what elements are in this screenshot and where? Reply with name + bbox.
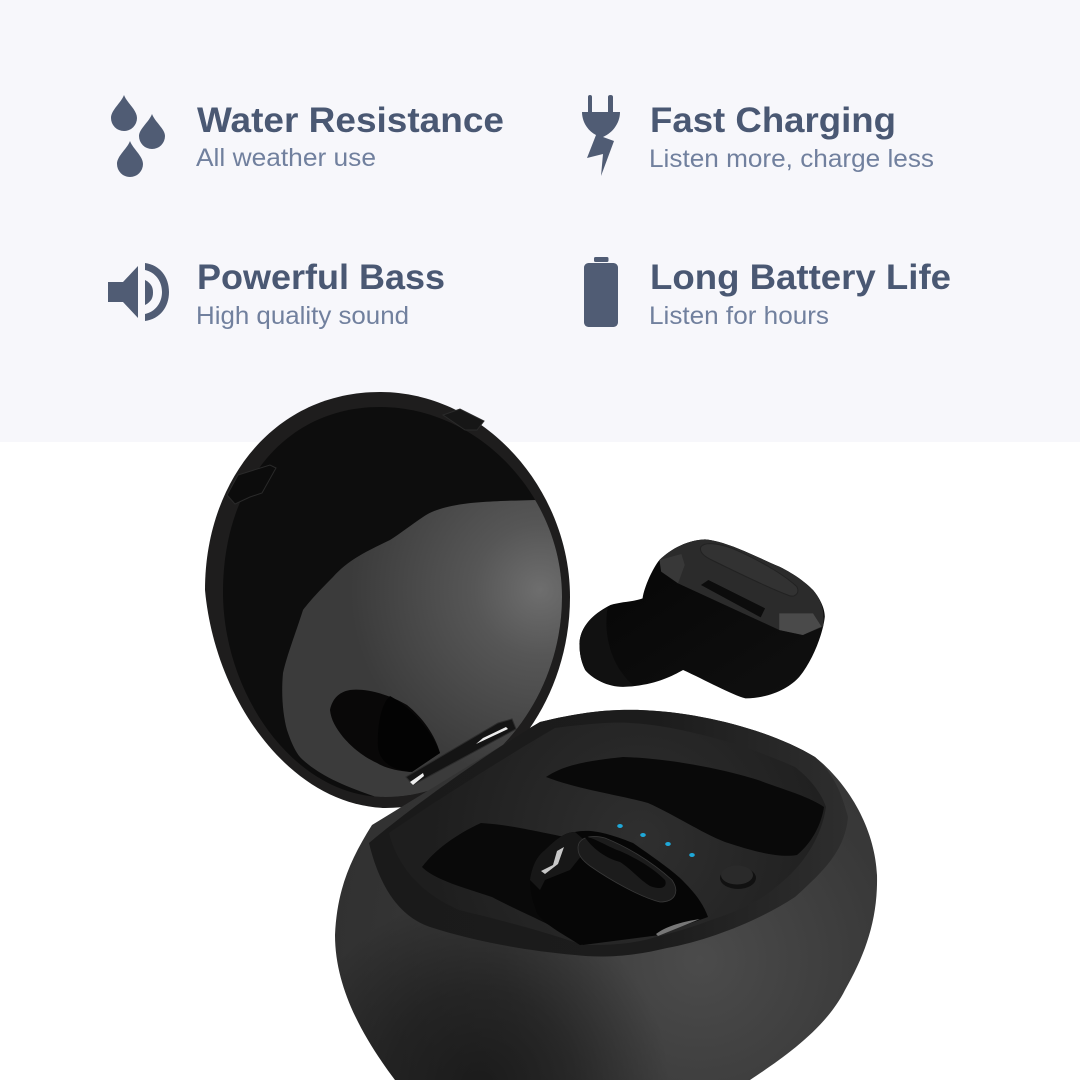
lid reflected earbud — [330, 690, 440, 772]
stored earbud — [530, 831, 708, 945]
feature: water resistance — [111, 95, 504, 177]
product: loose earbud — [579, 539, 825, 698]
earbud tip shading — [579, 607, 634, 686]
earbud slot — [701, 580, 765, 617]
case base — [290, 710, 877, 1080]
earbud top oval panel — [700, 544, 798, 596]
heading: fast charging: Fast Charging — [650, 101, 896, 140]
earbud facets — [659, 554, 685, 583]
earbud top face — [659, 539, 824, 635]
lid hinge — [406, 719, 516, 785]
case body — [335, 710, 877, 1080]
icon: battery — [584, 257, 618, 327]
charge indicator lights — [617, 824, 695, 857]
lid mirror reflection — [282, 500, 562, 797]
case button — [720, 866, 756, 889]
text: high quality sound: High quality sound — [196, 302, 409, 330]
case body lower shadow — [348, 941, 629, 1080]
feature: powerful bass — [108, 258, 445, 330]
icon: plug with lightning bolt — [582, 95, 620, 176]
heading: long battery life: Long Battery Life — [650, 258, 951, 297]
feature: fast charging — [582, 95, 934, 176]
case rim — [369, 710, 848, 957]
background: top panel — [0, 0, 1080, 442]
icon: water drops — [111, 95, 165, 177]
stored earbud highlights — [541, 847, 564, 874]
heading: powerful bass: Powerful Bass — [197, 258, 445, 297]
text: listen more, charge less: Listen more, charge less — [649, 145, 934, 173]
feature: long battery life — [584, 257, 951, 330]
case inner tray — [389, 723, 826, 945]
product: open charging case — [205, 392, 877, 1080]
lid latch right — [443, 409, 484, 430]
tray front well — [422, 823, 660, 945]
earbud silhouette — [579, 539, 825, 698]
icon: speaker — [108, 263, 169, 321]
text: all weather use: All weather use — [196, 144, 376, 172]
text: listen for hours: Listen for hours — [649, 302, 829, 330]
heading: water resistance: Water Resistance — [197, 101, 504, 140]
case lid — [205, 392, 600, 808]
tray back well — [546, 757, 824, 856]
lid latch left — [227, 465, 276, 504]
